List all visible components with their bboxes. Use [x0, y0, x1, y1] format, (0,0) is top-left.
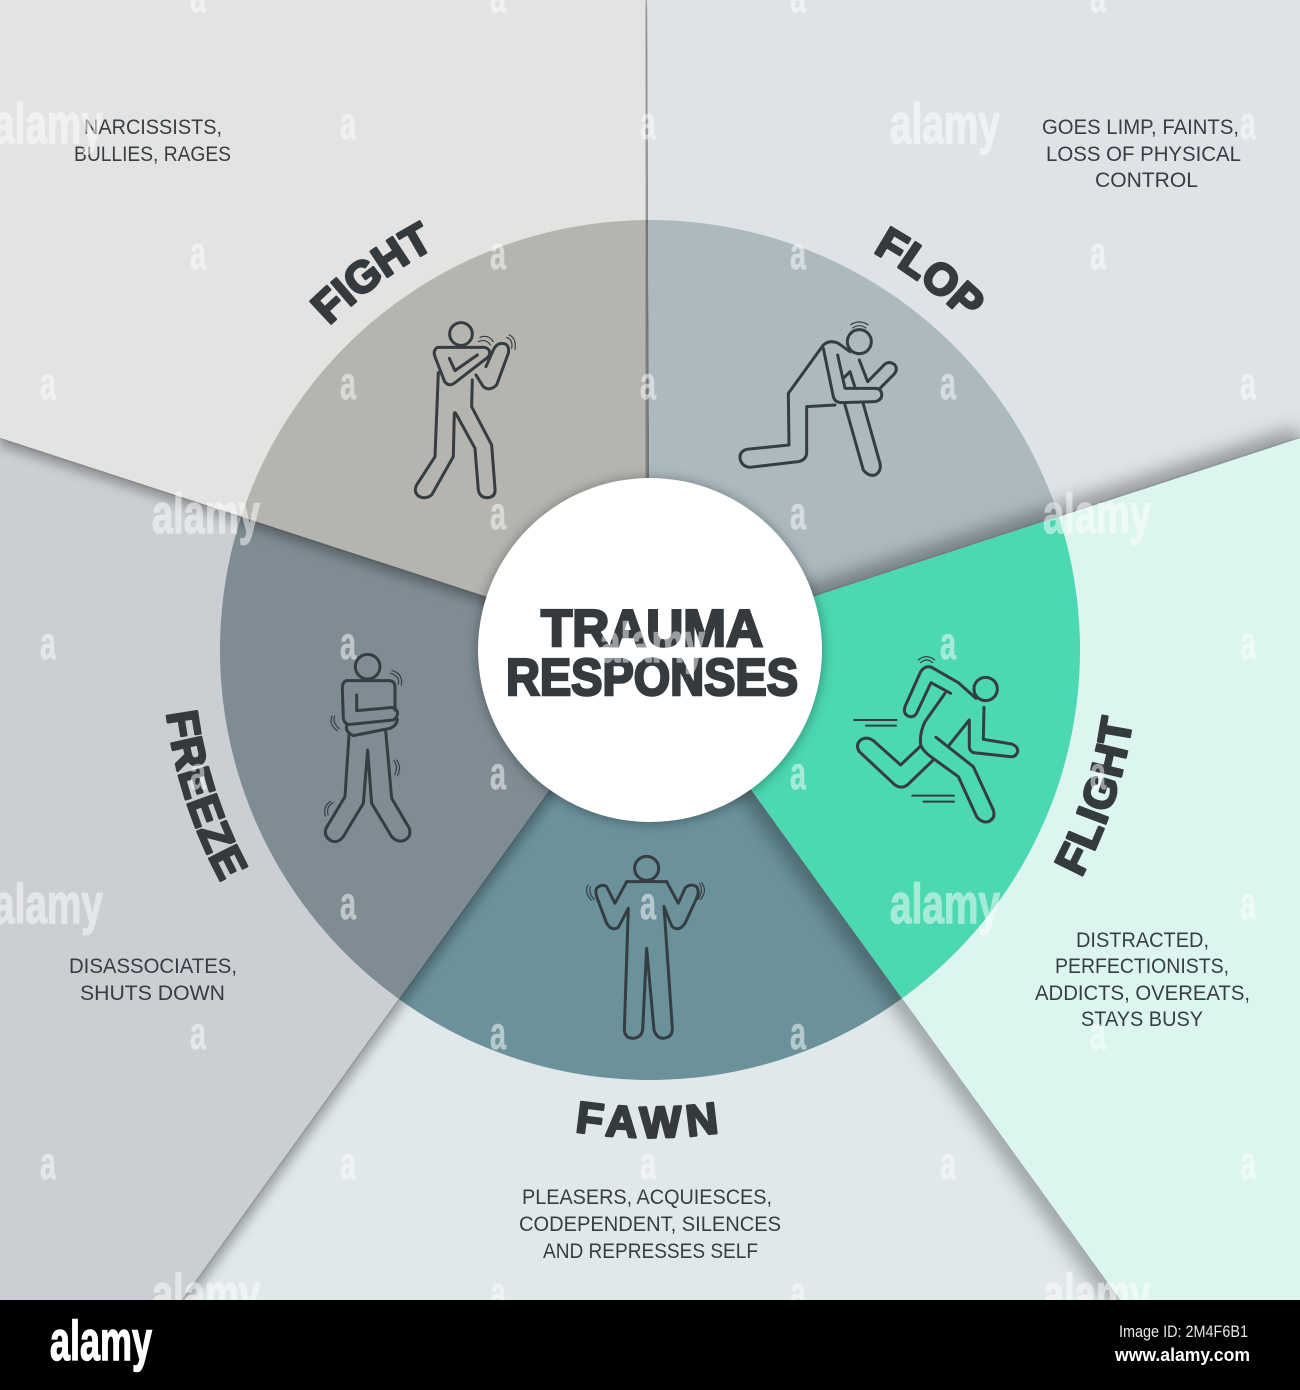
watermark: alamy pattern: a [490, 487, 506, 539]
icon: fight figure [415, 323, 515, 498]
watermark: alamy pattern: a [340, 1137, 356, 1189]
text: fawn description: PLEASERS, ACQUIESCES, [522, 1186, 772, 1209]
watermark: alamy pattern: a [790, 487, 806, 539]
watermark: alamy pattern: a [640, 97, 656, 149]
watermark: alamy pattern: a [790, 1267, 806, 1319]
watermark: alamy pattern: a [640, 1137, 656, 1189]
text: flight description [1035, 929, 1250, 1031]
watermark: alamy pattern: a [1240, 877, 1256, 929]
footer bar [0, 1300, 1300, 1390]
label: fight: FIGHT [309, 220, 428, 325]
watermark: alamy pattern: a [40, 357, 56, 409]
footer url: www.alamy.com [1114, 1345, 1250, 1365]
watermark: alamy pattern: a [1090, 227, 1106, 279]
watermark: alamy pattern: alamy [152, 1262, 260, 1325]
watermark: alamy pattern: alamy [152, 482, 260, 545]
watermark: alamy pattern: a [340, 617, 356, 669]
text: flight description: PERFECTIONISTS, [1055, 955, 1229, 978]
text: fawn description [519, 1186, 781, 1263]
panel: fawn [182, 790, 1120, 1300]
text: flight description: STAYS BUSY [1081, 1008, 1203, 1031]
text: flop description [1042, 116, 1241, 192]
watermark: alamy pattern: a [1240, 1137, 1256, 1189]
watermark: alamy pattern: a [1090, 1007, 1106, 1059]
icon: flight figure [854, 657, 1018, 822]
watermark: alamy pattern: a [190, 747, 206, 799]
watermark: alamy pattern: a [790, 747, 806, 799]
watermark: alamy pattern: a [340, 877, 356, 929]
watermark: alamy pattern: alamy [890, 872, 1000, 935]
label: flop: FLOP [874, 226, 984, 310]
watermark: alamy pattern: a [490, 747, 506, 799]
watermark: alamy pattern: a [1240, 97, 1256, 149]
label: fawn: FAWN [576, 1100, 718, 1139]
text: freeze description: SHUTS DOWN [80, 982, 225, 1005]
watermark: alamy pattern: a [940, 357, 956, 409]
watermark: alamy pattern: a [1090, 747, 1106, 799]
text: fight description: NARCISSISTS, [84, 116, 222, 139]
panel: fight [0, 0, 650, 596]
panel: flop [647, 0, 1300, 596]
watermark: alamy pattern: a [490, 1267, 506, 1319]
watermark: alamy pattern: a [490, 1007, 506, 1059]
footer logo: alamy [50, 1309, 152, 1372]
text: flop description: LOSS OF PHYSICAL [1046, 143, 1241, 166]
watermark: alamy pattern: a [1240, 357, 1256, 409]
text: fawn description: AND REPRESSES SELF [543, 1240, 758, 1263]
watermark: alamy pattern: a [790, 227, 806, 279]
title: TRAUMA [541, 600, 763, 658]
text: fight description: BULLIES, RAGES [74, 143, 231, 166]
watermark: alamy pattern: a [940, 1137, 956, 1189]
watermark: alamy pattern: alamy [1043, 1262, 1151, 1325]
watermark: alamy pattern: alamy [1043, 482, 1151, 545]
text: fight description [74, 116, 231, 166]
watermark: alamy pattern: a [640, 357, 656, 409]
text: flight description: DISTRACTED, [1076, 929, 1209, 952]
text: freeze description [69, 955, 237, 1005]
panel: freeze [0, 438, 550, 1300]
text: flop description: GOES LIMP, FAINTS, [1042, 116, 1239, 139]
panel: flight [750, 438, 1300, 1300]
text: fawn description: CODEPENDENT, SILENCES [519, 1213, 781, 1236]
footer image id: Image ID: 2M4F6B1 [1119, 1322, 1248, 1341]
text: flight description: ADDICTS, OVEREATS, [1035, 982, 1250, 1005]
title [506, 600, 798, 707]
watermark: alamy pattern: a [40, 1137, 56, 1189]
watermark: alamy pattern: alamy [600, 611, 705, 674]
label: flight: FLIGHT [1054, 714, 1132, 877]
watermark: alamy pattern: a [340, 357, 356, 409]
text: flop description: CONTROL [1095, 169, 1198, 192]
title: RESPONSES [506, 649, 798, 707]
watermark: alamy pattern: a [940, 617, 956, 669]
watermark: alamy pattern: a [190, 1007, 206, 1059]
icon: flop figure [740, 322, 896, 475]
icon: freeze figure [325, 654, 410, 842]
icon: fawn figure [587, 856, 704, 1038]
watermark: alamy pattern: a [790, 1007, 806, 1059]
watermark: alamy pattern: a [640, 877, 656, 929]
centre circle [477, 478, 823, 824]
watermark: alamy pattern: a [40, 617, 56, 669]
watermark: alamy pattern: a [340, 97, 356, 149]
watermark: alamy pattern: a [190, 227, 206, 279]
text: freeze description: DISASSOCIATES, [69, 955, 237, 978]
watermark: alamy pattern: a [490, 227, 506, 279]
watermark: alamy pattern: alamy [890, 92, 1000, 155]
label: freeze: FREEZE [166, 710, 248, 882]
watermark: alamy pattern: a [1240, 617, 1256, 669]
